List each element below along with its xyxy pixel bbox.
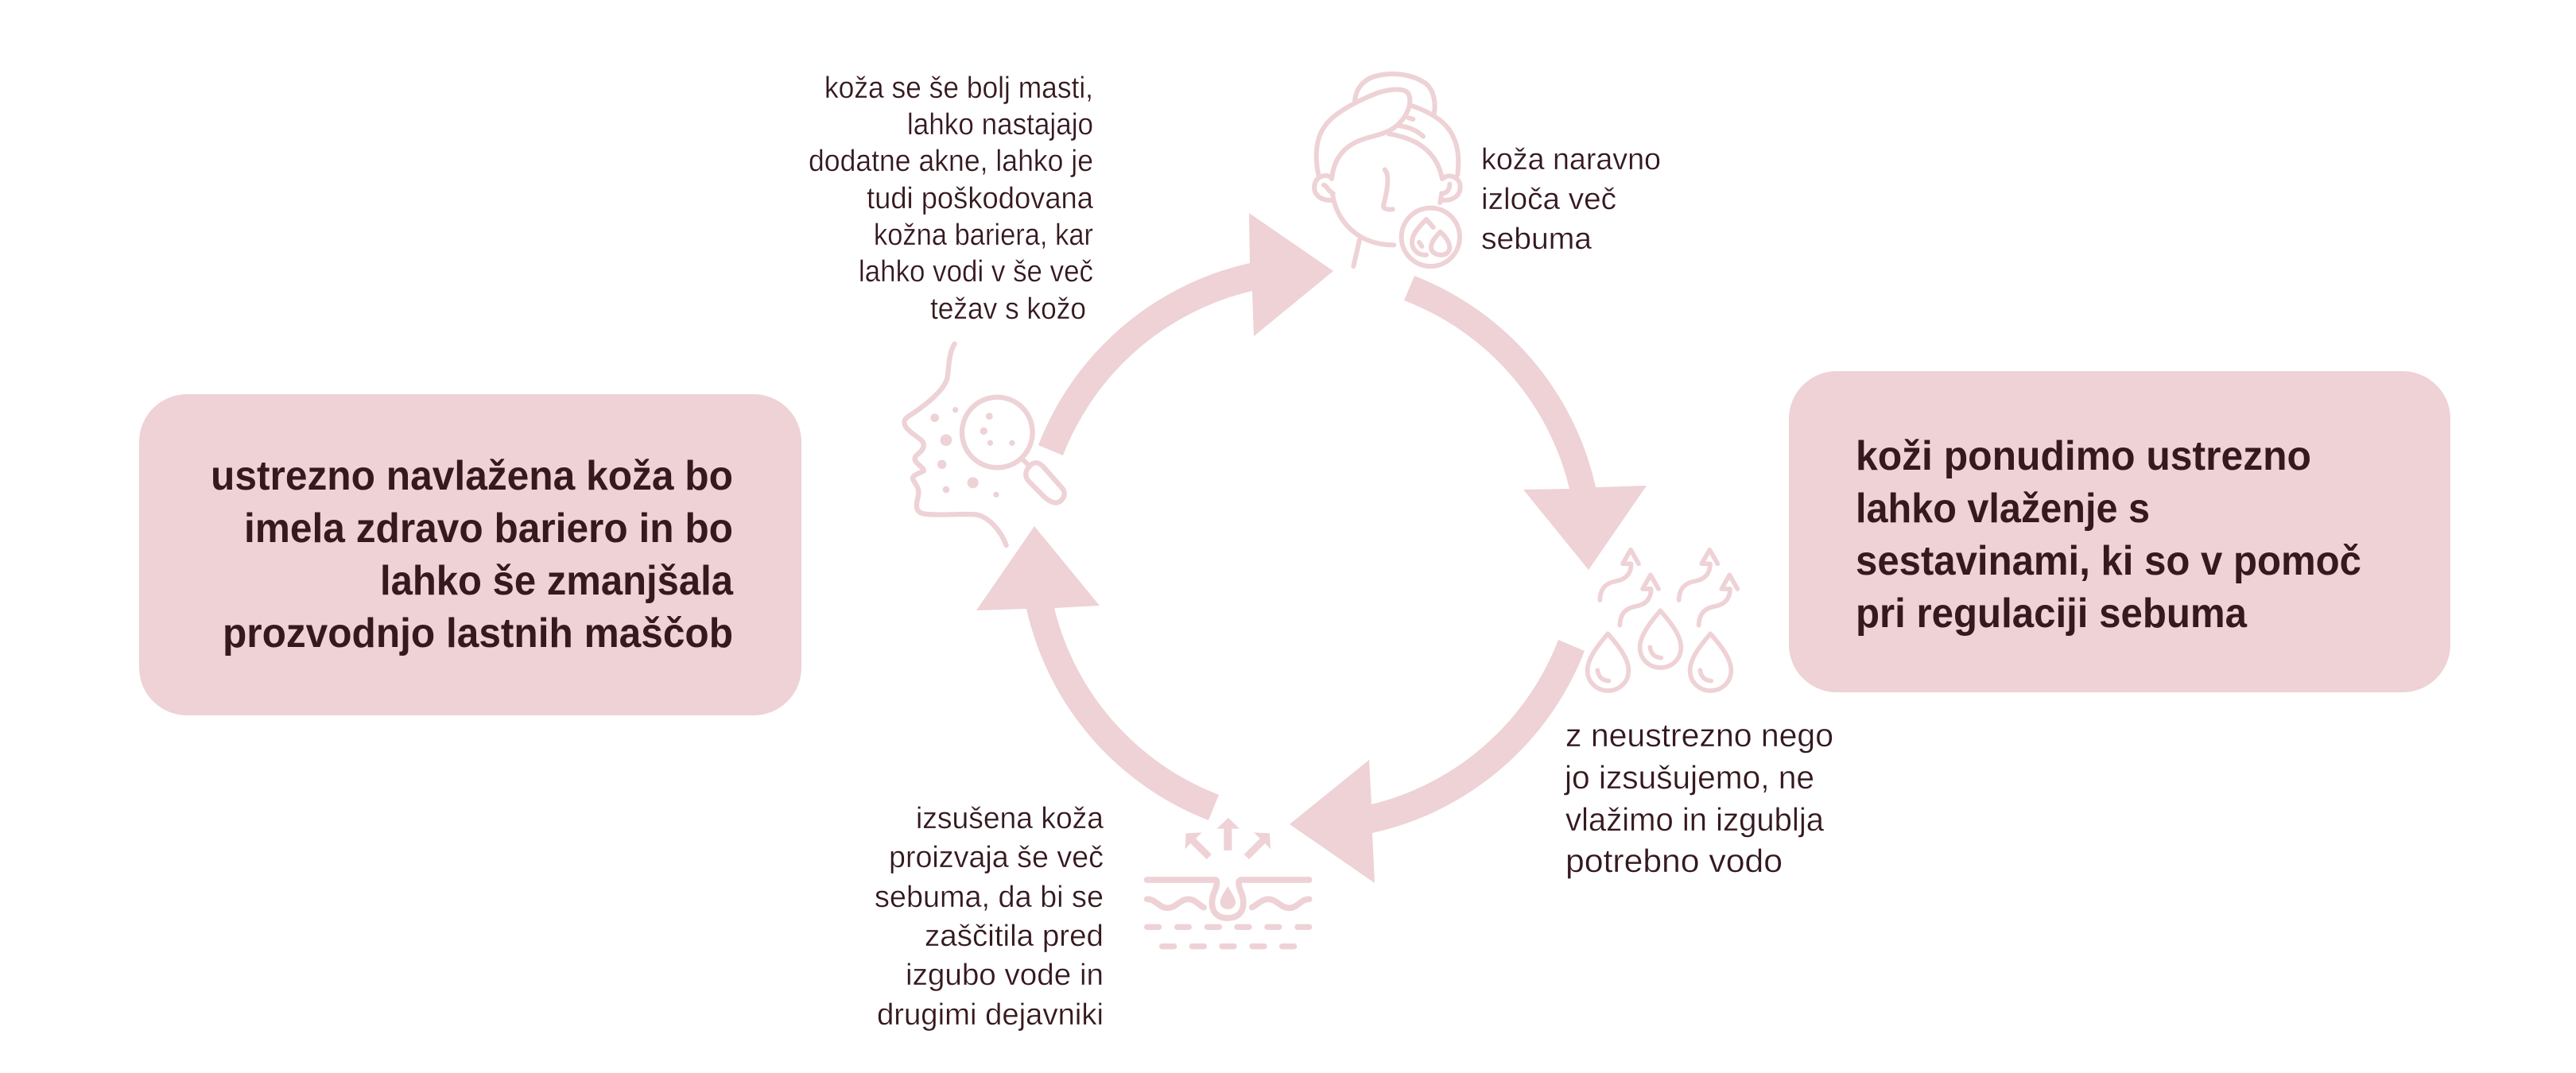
arrow: top to right (1404, 276, 1647, 570)
text: skin gets oilier: lahko vodi v še več (859, 255, 1093, 289)
text: skin naturally produces more sebum: sebuma (1481, 223, 1593, 256)
text: dried skin produces more sebum (875, 802, 1104, 1032)
panel: left conclusion: lahko še zmanjšala (380, 558, 734, 604)
text: improper care dries skin (1564, 717, 1833, 879)
text: dried skin produces more sebum: izsušena koža (916, 802, 1104, 835)
text: dried skin produces more sebum: sebuma, da bi se (875, 881, 1104, 914)
arrow: left to top (1038, 213, 1333, 455)
text: skin gets oilier (809, 72, 1094, 326)
text: skin gets oilier: dodatne akne, lahko je (809, 145, 1093, 178)
icon: skin cross-section with sebum (1147, 818, 1309, 947)
text: dried skin produces more sebum: drugimi dejavniki (877, 998, 1104, 1032)
icon: profile with acne and magnifier (904, 344, 1065, 545)
panel: right recommendation: sestavinami, ki so v pomoč (1856, 538, 2361, 584)
text: dried skin produces more sebum: izgubo vode in (906, 959, 1104, 992)
text: improper care dries skin: potrebno vodo (1565, 843, 1783, 879)
icon: face with towel and oil drops (1314, 74, 1461, 266)
text: skin gets oilier: kožna bariera, kar (874, 219, 1093, 252)
text: improper care dries skin: jo izsušujemo, ne (1564, 759, 1814, 796)
text: skin gets oilier: težav s kožo (930, 292, 1086, 326)
text: dried skin produces more sebum: zaščitila pred (925, 920, 1104, 953)
text: improper care dries skin: z neustrezno nego (1565, 717, 1833, 753)
text: skin gets oilier: koža se še bolj masti, (824, 72, 1093, 105)
panel: left conclusion: imela zdravo bariero in bo (244, 506, 733, 552)
text: skin naturally produces more sebum (1481, 143, 1661, 256)
text: dried skin produces more sebum: proizvaja še več (889, 841, 1104, 874)
panel: right recommendation: lahko vlaženje s (1856, 486, 2150, 532)
text: skin gets oilier: lahko nastajajo (907, 108, 1093, 141)
panel: right recommendation (1789, 371, 2450, 692)
panel: left conclusion: ustrezno navlažena koža bo (211, 453, 733, 499)
arrow: right to bottom (1290, 640, 1585, 883)
text: skin naturally produces more sebum: koža naravno (1481, 143, 1661, 176)
panel: right recommendation: pri regulaciji sebuma (1856, 591, 2248, 637)
panel: left conclusion: prozvodnjo lastnih maščob (223, 610, 733, 657)
panel: right recommendation: koži ponudimo ustrezno (1856, 433, 2311, 479)
panel: left conclusion (139, 394, 801, 715)
arrow: bottom to left (976, 526, 1219, 820)
text: improper care dries skin: vlažimo in izgublja (1565, 801, 1824, 838)
text: skin naturally produces more sebum: izloča več (1481, 183, 1616, 216)
icon: evaporating water drops (1588, 550, 1737, 691)
text: skin gets oilier: tudi poškodovana (867, 182, 1094, 215)
